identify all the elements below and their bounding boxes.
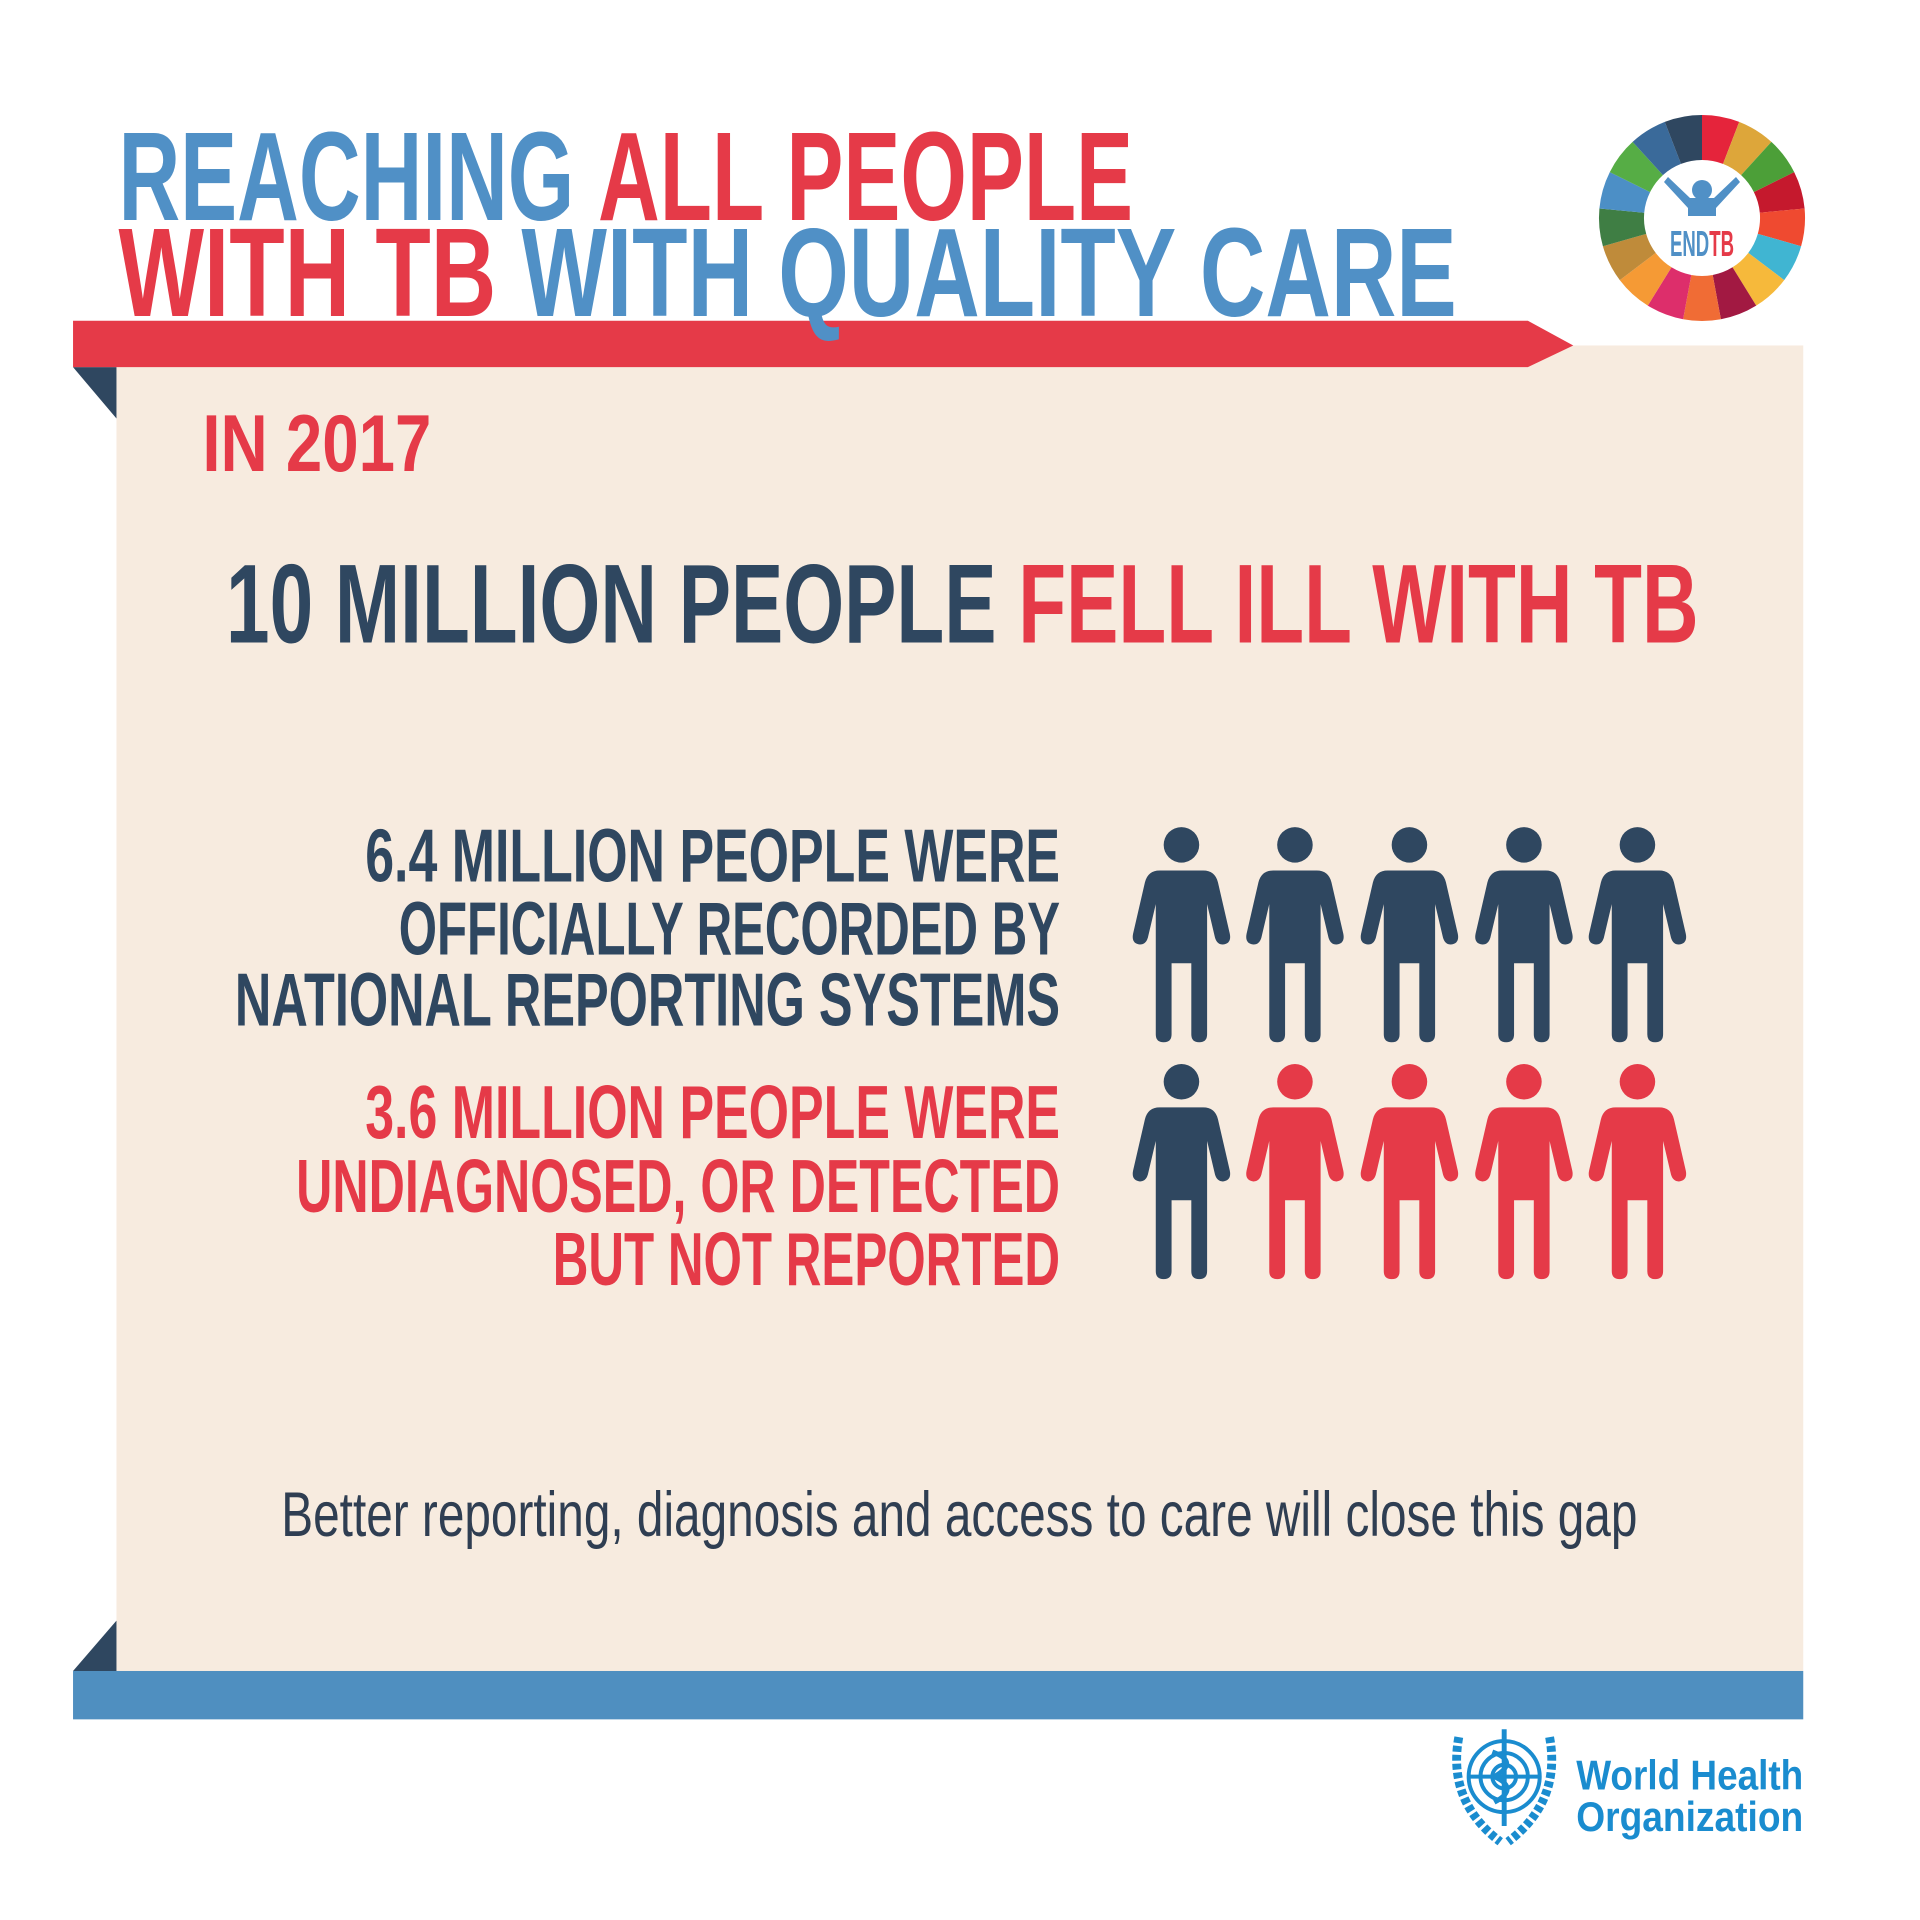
logo: World Health Organization [1457,1729,1803,1842]
logo: World Health Organization: World Health [1576,1751,1803,1798]
title: REACHING ALL PEOPLE [118,106,1133,247]
text block: 3.6 million undiagnosed: BUT NOT REPORTED [553,1217,1060,1301]
fold triangle top [73,367,116,418]
icon: END TB logo: ENDTB [1670,223,1734,264]
title: WITH TB WITH QUALITY CARE [118,202,1457,343]
red banner arrow [73,321,1573,367]
text block: 3.6 million undiagnosed [296,1070,1060,1301]
blue bottom bar [73,1671,1803,1719]
pictogram: people [1133,827,1686,1279]
text block: 6.4 million recorded [235,813,1060,1041]
icon: END TB logo [1599,115,1805,321]
heading: IN 2017: IN 2017 [202,399,431,489]
logo: World Health Organization: Organization [1576,1793,1803,1840]
text block: 3.6 million undiagnosed: 3.6 MILLION PEOPLE WERE [365,1070,1060,1154]
text block: 6.4 million recorded: OFFICIALLY RECORDED BY [399,886,1060,970]
fold triangle bottom [73,1621,116,1671]
title [118,106,1457,343]
panel: beige background [116,345,1803,1671]
text block: 6.4 million recorded: 6.4 MILLION PEOPLE WERE [365,813,1060,897]
text block: 3.6 million undiagnosed: UNDIAGNOSED, OR DETECTED [296,1144,1060,1228]
text block: 6.4 million recorded: NATIONAL REPORTING SYSTEMS [235,957,1060,1041]
